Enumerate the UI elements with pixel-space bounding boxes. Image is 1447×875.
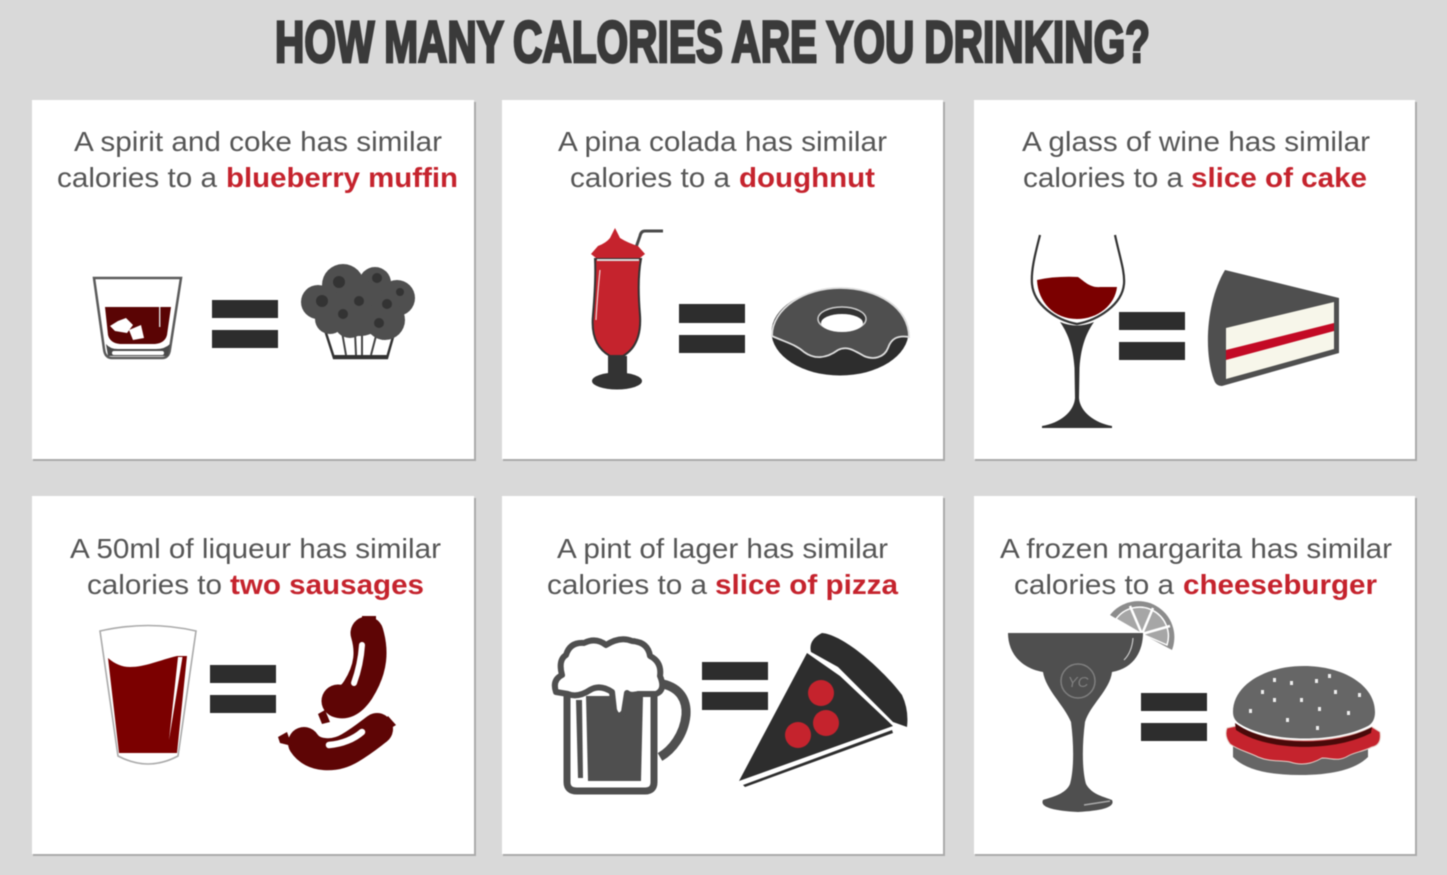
- icon: slice of cake: [1208, 270, 1339, 386]
- icon: slice of pizza: [739, 633, 907, 787]
- panel: pina colada: [502, 100, 945, 461]
- text: lager comparison: slice of pizza: [715, 569, 898, 600]
- panel: spirit and coke: [32, 100, 476, 461]
- text: liqueur comparison: calories to: [87, 569, 222, 600]
- icon: wine glass: [1032, 235, 1124, 428]
- icon: equals sign: [212, 300, 278, 348]
- text: margarita comparison: A frozen margarita has similar: [1000, 533, 1392, 564]
- icon: glass of liqueur: [100, 626, 196, 764]
- icon: equals sign: [702, 662, 768, 710]
- text: spirit and coke comparison: A spirit and coke has similar: [74, 126, 442, 157]
- panel: glass of wine: [974, 100, 1417, 461]
- icon: blueberry muffin: [301, 264, 415, 359]
- icon: equals sign: [679, 304, 745, 353]
- text: margarita comparison: cheeseburger: [1183, 569, 1377, 600]
- text: spirit and coke comparison: [57, 126, 458, 193]
- text: margarita comparison: calories to a: [1014, 569, 1174, 600]
- text: spirit and coke comparison: calories to a: [57, 162, 217, 193]
- text: wine comparison: A glass of wine has similar: [1022, 126, 1370, 157]
- icon: two sausages: [278, 616, 396, 754]
- text: wine comparison: [1022, 126, 1370, 193]
- icon: beer mug: [555, 639, 686, 791]
- text: margarita comparison: [1000, 533, 1392, 600]
- icon: margarita glass: YC: [1068, 674, 1089, 691]
- icon: equals sign: [1119, 312, 1185, 360]
- text: lager comparison: calories to a: [547, 569, 707, 600]
- text: lager comparison: A pint of lager has similar: [557, 533, 888, 564]
- text: pina colada comparison: [558, 126, 887, 193]
- text: liqueur comparison: A 50ml of liqueur has similar: [70, 533, 441, 564]
- panel: frozen margarita: [974, 496, 1417, 856]
- icon: cheeseburger: [1226, 666, 1380, 775]
- text: wine comparison: calories to a: [1023, 162, 1183, 193]
- panel: lager: [502, 496, 945, 856]
- text: lager comparison: [547, 533, 898, 600]
- icon: hurricane glass with straw: [591, 228, 663, 390]
- icon: equals sign: [210, 665, 276, 713]
- text: pina colada comparison: calories to a: [570, 162, 730, 193]
- panel: liqueur: [32, 496, 476, 856]
- text: spirit and coke comparison: blueberry muffin: [226, 162, 458, 193]
- text: wine comparison: slice of cake: [1191, 162, 1367, 193]
- text: pina colada comparison: doughnut: [739, 162, 875, 193]
- icon: margarita glass: [1008, 633, 1143, 812]
- icon: doughnut: [772, 288, 909, 376]
- text: pina colada comparison: A pina colada has similar: [558, 126, 887, 157]
- text: liqueur comparison: two sausages: [230, 569, 424, 600]
- text: liqueur comparison: [70, 533, 441, 600]
- icon: equals sign: [1141, 693, 1207, 741]
- icon: tumbler with spirit and ice: [94, 278, 181, 358]
- icon: lime wedge: [1110, 601, 1174, 650]
